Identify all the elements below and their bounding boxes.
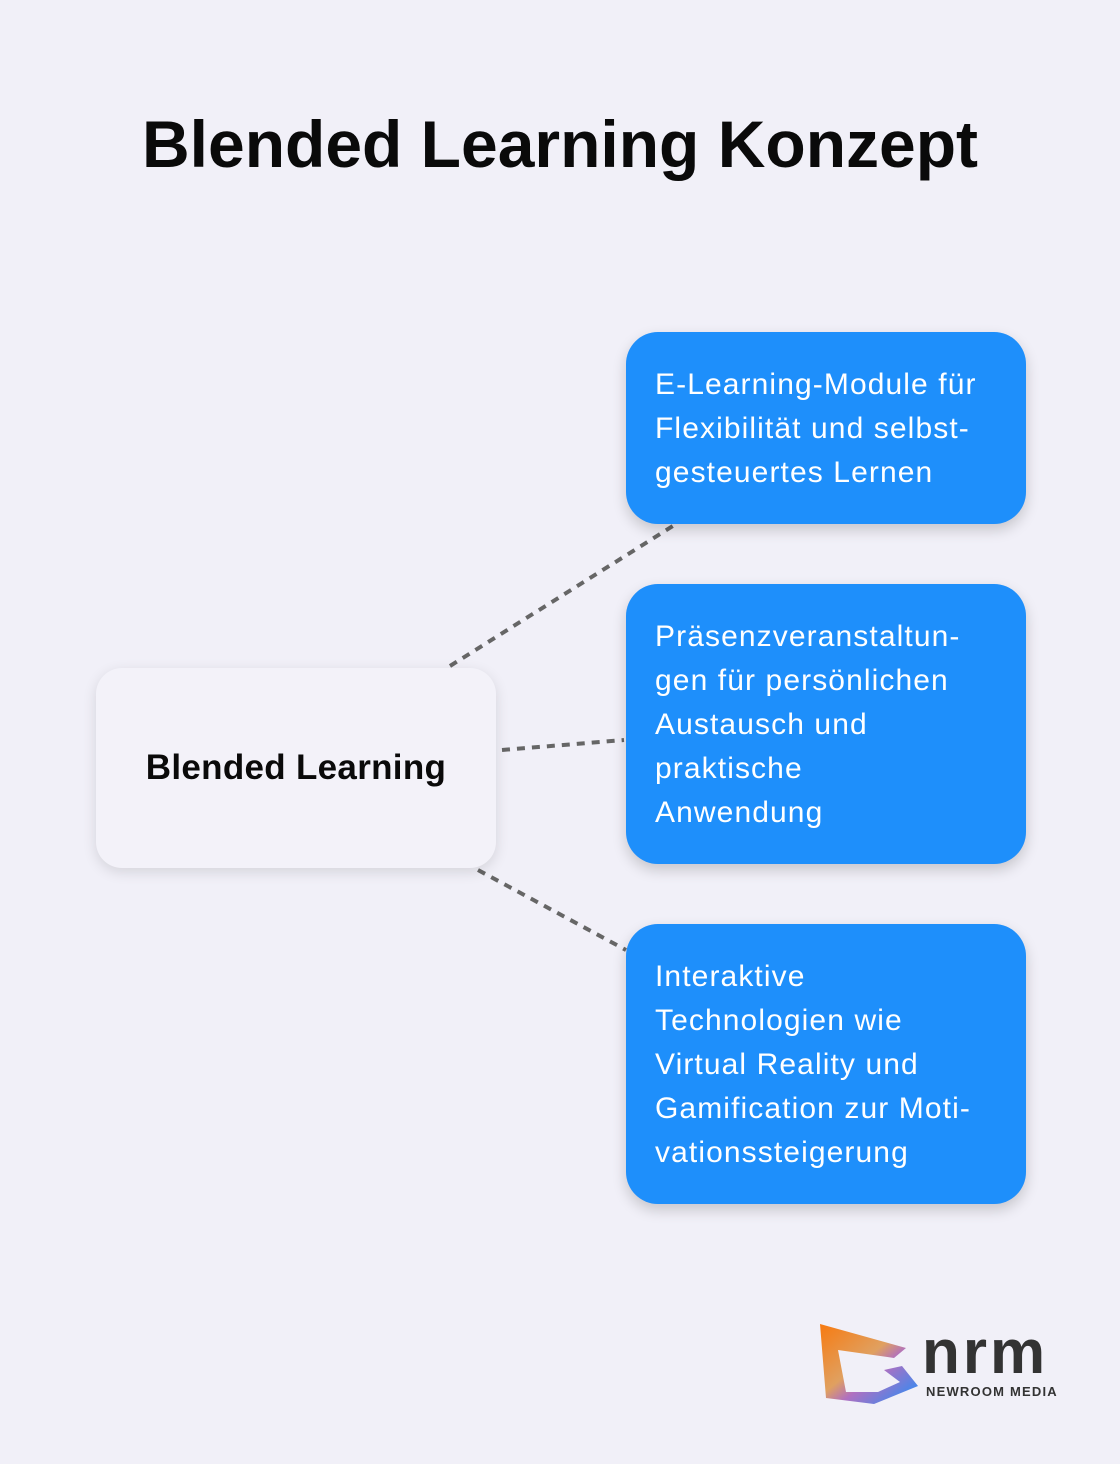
title: Blended Learning Konzept	[142, 107, 978, 181]
box: e-learning: Flexibilität und selbst-	[655, 412, 970, 445]
box: technologies: vationssteigerung	[655, 1136, 909, 1169]
box: presence: Austausch und	[655, 708, 868, 741]
box: technologies: Technologien wie	[655, 1004, 903, 1037]
logo: nrm	[922, 1318, 1048, 1387]
box: presence: gen für persönlichen	[655, 664, 949, 697]
box: presence: praktische	[655, 752, 803, 785]
box: presence	[626, 584, 1026, 864]
box: presence: Anwendung	[655, 796, 823, 829]
box: e-learning: gesteuertes Lernen	[655, 456, 933, 489]
center node: Blended Learning	[146, 748, 446, 787]
box: e-learning: E-Learning-Module für	[655, 368, 977, 401]
logo	[820, 1318, 1058, 1404]
box: presence: Präsenzveranstaltun-	[655, 620, 960, 653]
box: technologies	[626, 924, 1026, 1204]
box: technologies: Virtual Reality und	[655, 1048, 919, 1081]
logo: NEWROOM MEDIA	[926, 1384, 1058, 1399]
box: technologies: Gamification zur Moti-	[655, 1092, 971, 1125]
box: technologies: Interaktive	[655, 960, 806, 993]
center node	[96, 668, 496, 868]
box: e-learning	[626, 332, 1026, 524]
